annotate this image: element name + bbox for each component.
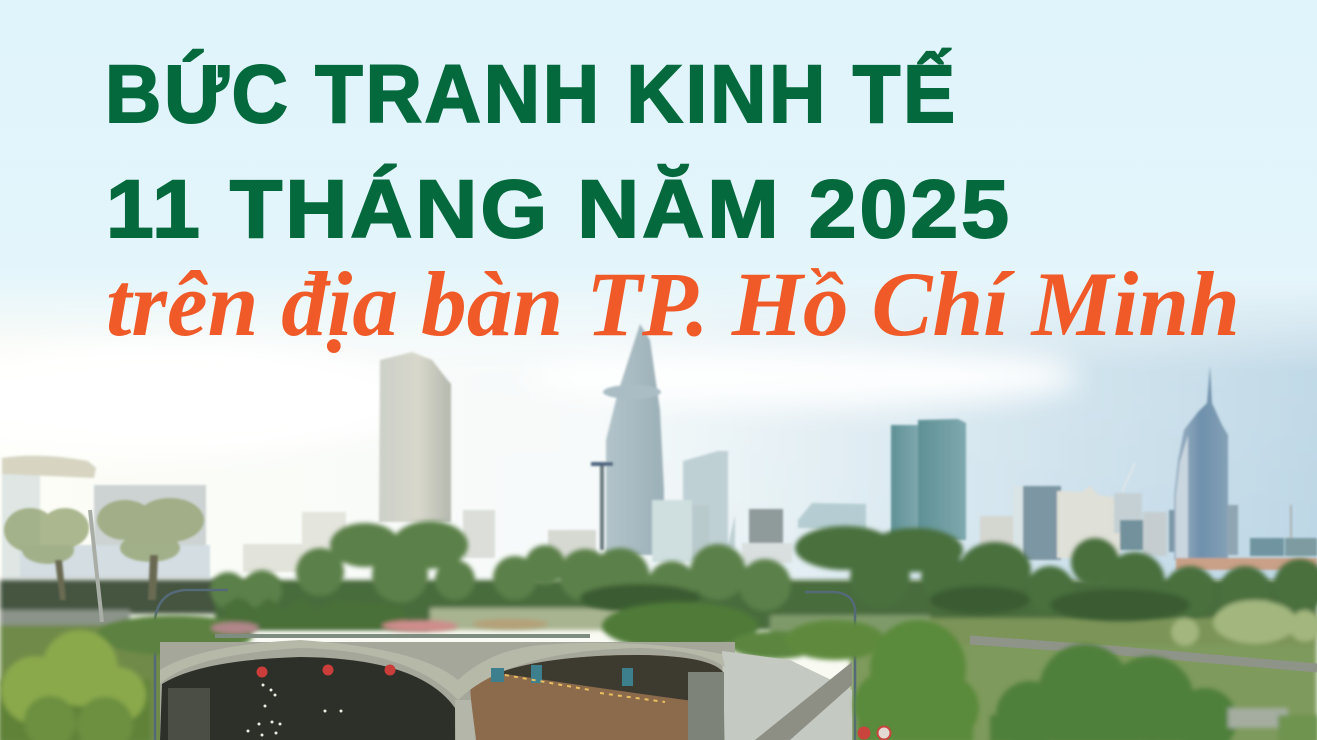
road signs — [858, 726, 890, 740]
no-entry signs — [256, 664, 396, 678]
street lamps — [90, 510, 855, 740]
tower: Bitexco — [591, 324, 664, 555]
tunnel concrete face — [160, 642, 735, 740]
background: sky — [0, 293, 1317, 714]
wall at right — [1228, 708, 1288, 728]
walkway railing — [970, 640, 1317, 668]
staircase — [755, 662, 852, 740]
foreground shrubs — [0, 620, 1317, 740]
tower: Vietcombank — [1169, 366, 1317, 570]
ground base — [0, 580, 1317, 740]
tower: left tall residential — [243, 352, 596, 572]
shrub: left — [0, 630, 150, 740]
right tunnel opening — [470, 655, 723, 740]
left pale trees — [4, 498, 204, 600]
towers: central cluster — [652, 451, 866, 563]
left white canopy building — [2, 456, 234, 586]
title line 3: trên địa bàn TP. Hồ Chí Minh — [106, 253, 1240, 355]
traffic lights — [246, 684, 342, 736]
title — [105, 49, 1240, 355]
tree band — [210, 521, 1317, 646]
shrub: right — [990, 644, 1237, 740]
title line 1: BỨC TRANH KINH TẾ — [105, 49, 958, 140]
tunnel — [160, 636, 852, 740]
trees and greenery — [0, 498, 1317, 740]
railing — [215, 634, 590, 638]
towers: hotel group — [980, 463, 1167, 560]
flower hedge — [97, 597, 885, 660]
left tunnel opening — [160, 657, 455, 740]
centre pillar and arches — [160, 640, 725, 700]
lane signs — [491, 665, 633, 686]
city skyline — [2, 324, 1317, 586]
title line 2: 11 THÁNG NĂM 2025 — [106, 164, 1012, 255]
shrub: centre — [854, 620, 979, 740]
towers: twin glass — [891, 419, 966, 540]
